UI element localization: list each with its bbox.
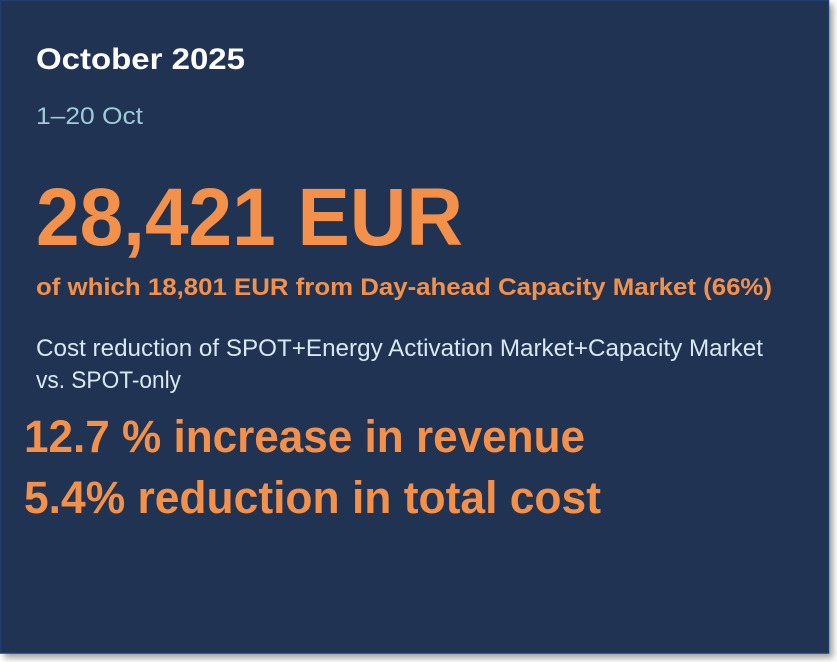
title: October 2025 xyxy=(36,43,245,76)
capacity market subheading: of which 18,801 EUR from Day-ahead Capacity Market (66%) xyxy=(36,274,772,301)
cost reduction description: Cost reduction of SPOT+Energy Activation Market+Capacity Market xyxy=(36,335,763,362)
headline total: 28,421 EUR xyxy=(36,172,463,263)
cost reduction description: vs. SPOT-only xyxy=(36,367,181,394)
revenue increase stat: 12.7 % increase in revenue xyxy=(24,411,585,462)
cost reduction description xyxy=(36,335,763,394)
date range: 1–20 Oct xyxy=(36,103,143,130)
total cost reduction stat: 5.4% reduction in total cost xyxy=(24,472,601,523)
